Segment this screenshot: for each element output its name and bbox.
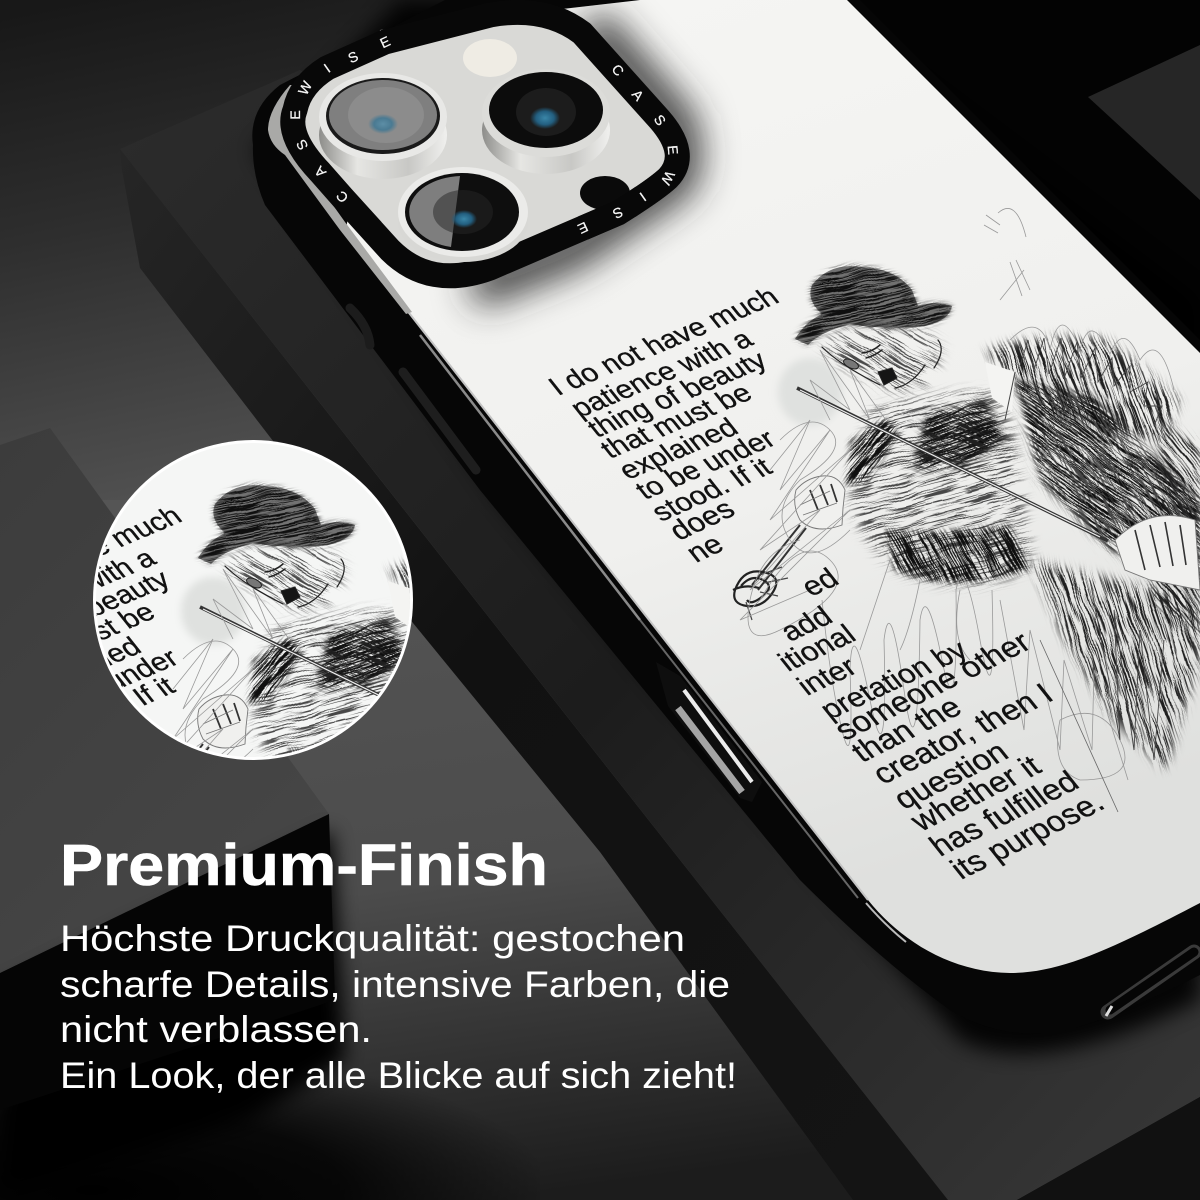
brand ring lettering: CASEWISE: S <box>293 137 311 153</box>
brand ring lettering: CASEWISE: W <box>657 168 678 188</box>
body text <box>60 918 737 1096</box>
quote text: stood. If it <box>645 452 778 527</box>
brand ring lettering: CASEWISE: W <box>295 78 316 98</box>
quote text: creator, then I <box>866 677 1060 790</box>
phone shadow <box>255 0 1200 1053</box>
brand ring lettering: CASEWISE: I <box>637 189 649 205</box>
brand ring lettering: CASEWISE: E <box>287 110 303 120</box>
brand ring lettering: CASEWISE: A <box>629 86 648 104</box>
quote text: itional <box>772 619 862 677</box>
magnified quote <box>96 508 182 706</box>
quote text: has fulfilled <box>923 765 1085 862</box>
quote text: inter <box>791 651 864 701</box>
quote text: does <box>663 494 741 546</box>
quote text: whether it <box>903 749 1048 838</box>
magnified quote: that must be <box>0 597 162 683</box>
lidar sensor <box>580 176 630 210</box>
magnified quote: explained <box>15 632 148 704</box>
artwork: sketch of violinist <box>733 208 1200 820</box>
quote text: explained <box>612 413 745 485</box>
brand ring lettering: CASEWISE: S <box>610 204 626 222</box>
flash <box>463 39 517 77</box>
case clear strip beside camera <box>268 85 412 314</box>
quote text: to be under <box>629 424 782 505</box>
brand ring lettering: CASEWISE: E <box>377 33 393 51</box>
quote text: that must be <box>594 378 759 464</box>
brand ring lettering: CASEWISE: E <box>575 219 591 237</box>
lens 3 <box>398 167 528 262</box>
body text: Höchste Druckqualität: gestochen <box>60 918 685 959</box>
brand ring lettering: CASEWISE: A <box>310 163 329 181</box>
icon: side slot small <box>350 308 370 345</box>
brand ring lettering: CASEWISE: C <box>609 61 627 79</box>
brand ring lettering: CASEWISE: I <box>321 60 333 76</box>
phone case body <box>252 0 1200 1034</box>
lens 1 <box>319 73 447 179</box>
brand ring lettering: CASEWISE <box>287 33 681 237</box>
lens 2 <box>482 69 610 174</box>
gray smudge behind bow <box>778 358 842 426</box>
quote text: thing of beauty <box>581 345 774 443</box>
background: left block with black side <box>0 428 540 1200</box>
quote text: I do not have much <box>542 282 785 401</box>
phone <box>252 0 1200 1034</box>
icon: speaker slot <box>1106 952 1194 1016</box>
screen rim <box>420 335 906 942</box>
quote text <box>542 282 1111 885</box>
back panel <box>345 0 1200 973</box>
body text: Ein Look, der alle Blicke auf sich zieht! <box>60 1055 737 1096</box>
body text: scharfe Details, intensive Farben, die <box>60 964 730 1005</box>
icon: volume button <box>403 372 476 470</box>
camera window and brand ring <box>293 12 677 276</box>
brand ring lettering: CASEWISE: S <box>345 48 361 66</box>
quote text: ed <box>795 563 845 602</box>
body text: nicht verblassen. <box>60 1009 372 1050</box>
heading: Premium-Finish <box>60 833 548 898</box>
detail circle <box>93 440 413 760</box>
magnified quote: to be under <box>32 643 185 724</box>
screen edge highlight <box>395 295 868 900</box>
brand ring lettering: CASEWISE: C <box>333 188 351 206</box>
quote text: question <box>887 735 1015 815</box>
magnified quote: stood. If it <box>48 671 181 746</box>
ring band repaint over sensor <box>583 178 668 228</box>
camera shadow on panel <box>473 23 683 290</box>
quote text: its purpose. <box>944 786 1111 885</box>
background: top right block <box>700 0 1200 420</box>
brand ring lettering: CASEWISE: S <box>651 112 669 128</box>
quote text: patience with a <box>564 324 759 423</box>
brand ring lettering: CASEWISE: E <box>665 145 681 155</box>
quote text: someone other <box>828 625 1037 746</box>
icon: silver button <box>656 662 762 802</box>
quote text: than the <box>845 690 968 768</box>
quote text: ne <box>680 529 730 568</box>
quote text: add <box>774 601 839 647</box>
magnified artwork <box>172 480 410 757</box>
quote text: pretation by <box>814 634 974 725</box>
